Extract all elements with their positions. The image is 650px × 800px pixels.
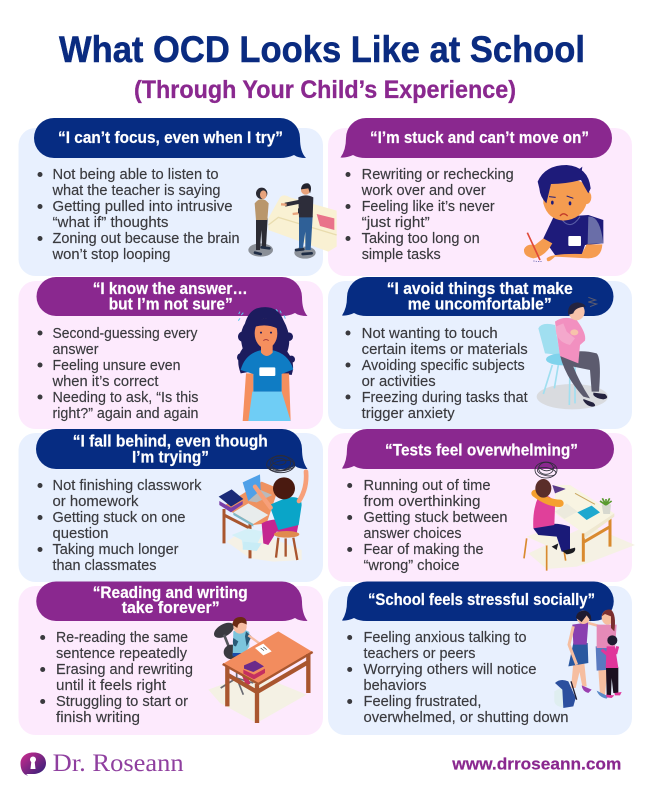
- bullet list: Feeling frustrated,: [364, 694, 482, 710]
- bullet list: Erasing and rewriting: [56, 662, 193, 678]
- bullet list: certain items or materials: [362, 342, 528, 358]
- bullet list: or activities: [362, 374, 436, 390]
- speech bubble heading: but I’m not sure”: [109, 296, 233, 314]
- bullet list: Feeling anxious talking to: [364, 630, 526, 646]
- illustration: student at desk with laptop: [219, 455, 306, 562]
- bullet list: answer choices: [364, 526, 462, 542]
- bullet list: Worrying others will notice: [364, 662, 536, 678]
- speech bubble heading: “School feels stressful socially”: [368, 591, 595, 609]
- bullet list: Needing to ask, “Is this: [52, 390, 198, 406]
- speech bubble heading: “I know the answer…: [93, 280, 248, 298]
- bullet list: simple tasks: [362, 247, 441, 263]
- speech bubble heading: [37, 277, 308, 316]
- panel: stuck: [328, 118, 632, 276]
- icon: keyhole speech bubble: [20, 752, 46, 776]
- bullet list: Not finishing classwork: [52, 478, 202, 494]
- panel: reading and writing: [18, 582, 323, 735]
- panel: tests: [328, 429, 632, 582]
- bullet list: until it feels right: [56, 678, 166, 694]
- panel: can't focus: [18, 118, 323, 276]
- bullet list: Rewriting or rechecking: [362, 167, 514, 183]
- bullet list: what the teacher is saying: [51, 183, 220, 199]
- bullet list: from overthinking: [364, 494, 480, 510]
- illustration: family with a backpack: [554, 610, 622, 708]
- logo: Dr. Roseann: Dr. Roseann: [53, 750, 184, 777]
- title: What OCD Looks Like at School: [59, 29, 585, 70]
- bullet list: Getting pulled into intrusive: [52, 199, 232, 215]
- bullet list: than classmates: [52, 558, 156, 574]
- speech bubble heading: “Tests feel overwhelming”: [385, 442, 578, 460]
- speech bubble heading: [36, 429, 308, 469]
- bullet list: [38, 167, 240, 263]
- bullet list: sentence repeatedly: [56, 646, 188, 662]
- bullet list: [346, 326, 528, 422]
- speech bubble heading: take forever”: [122, 599, 220, 617]
- illustration: two people arguing by a sofa: [248, 183, 337, 259]
- bullet list: Not wanting to touch: [362, 326, 498, 342]
- illustration: worried girl: [237, 307, 295, 421]
- subtitle: (Through Your Child’s Experience): [134, 76, 516, 104]
- speech bubble heading: “I fall behind, even though: [73, 432, 268, 450]
- bullet list: [347, 478, 508, 574]
- bullet list: overwhelmed, or shutting down: [364, 710, 568, 726]
- bullet list: finish writing: [56, 710, 140, 726]
- speech bubble heading: I’m trying”: [132, 449, 209, 467]
- speech bubble heading: [342, 582, 614, 621]
- bullet list: behaviors: [364, 678, 426, 694]
- bullet list: [38, 326, 198, 422]
- bullet list: “wrong” choice: [364, 558, 460, 574]
- bullet list: work over and over: [361, 183, 486, 199]
- bullet list: [346, 167, 514, 263]
- speech bubble heading: “Reading and writing: [93, 584, 248, 602]
- bullet list: Feeling like it’s never: [362, 199, 495, 215]
- bullet list: Taking much longer: [52, 542, 179, 558]
- illustration: anxious person on a chair: [537, 297, 608, 409]
- bullet list: Avoiding specific subjects: [362, 358, 525, 374]
- bullet list: Struggling to start or: [56, 694, 188, 710]
- panel: stressful socially: [328, 582, 632, 735]
- bullet list: won’t stop looping: [51, 247, 170, 263]
- panel: know the answer: [18, 277, 323, 429]
- speech bubble heading: “I’m stuck and can’t move on”: [370, 129, 589, 147]
- bullet list: question: [52, 526, 108, 542]
- illustration: boy writing: [524, 165, 603, 262]
- bullet list: [40, 630, 193, 726]
- bullet list: right?” again and again: [52, 406, 198, 422]
- bullet list: Second-guessing every: [52, 326, 198, 342]
- bullet list: Getting stuck between: [364, 510, 508, 526]
- panel: fall behind: [18, 429, 323, 582]
- bullet list: when it’s correct: [51, 374, 159, 390]
- bullet list: trigger anxiety: [362, 406, 455, 422]
- speech bubble heading: [342, 277, 613, 316]
- speech bubble heading: “I can’t focus, even when I try”: [58, 129, 283, 147]
- bullet list: Getting stuck on one: [52, 510, 186, 526]
- illustration: child at a large desk: [208, 617, 313, 723]
- speech bubble heading: [342, 429, 614, 469]
- bullet list: Feeling unsure even: [52, 358, 180, 374]
- speech bubble heading: “I avoid things that make: [387, 280, 573, 298]
- website url: www.drroseann.com: [451, 756, 621, 774]
- bullet list: Fear of making the: [364, 542, 484, 558]
- bullet list: teachers or peers: [364, 646, 476, 662]
- illustration: overwhelmed student at a desk: [524, 462, 635, 571]
- bullet list: Freezing during tasks that: [362, 390, 528, 406]
- speech bubble heading: me uncomfortable”: [408, 296, 552, 314]
- bullet list: “just right”: [362, 215, 430, 231]
- bullet list: Running out of time: [364, 478, 490, 494]
- bullet list: [347, 630, 568, 726]
- bullet list: answer: [52, 342, 99, 358]
- bullet list: Zoning out because the brain: [52, 231, 240, 247]
- bullet list: [38, 478, 202, 574]
- bullet list: Not being able to listen to: [52, 167, 218, 183]
- bullet list: Taking too long on: [362, 231, 480, 247]
- speech bubble heading: [34, 118, 306, 158]
- speech bubble heading: [340, 118, 612, 158]
- bullet list: “what if” thoughts: [52, 215, 168, 231]
- speech bubble heading: [36, 582, 308, 621]
- panel: avoid things: [328, 277, 632, 429]
- bullet list: or homework: [52, 494, 139, 510]
- bullet list: Re-reading the same: [56, 630, 188, 646]
